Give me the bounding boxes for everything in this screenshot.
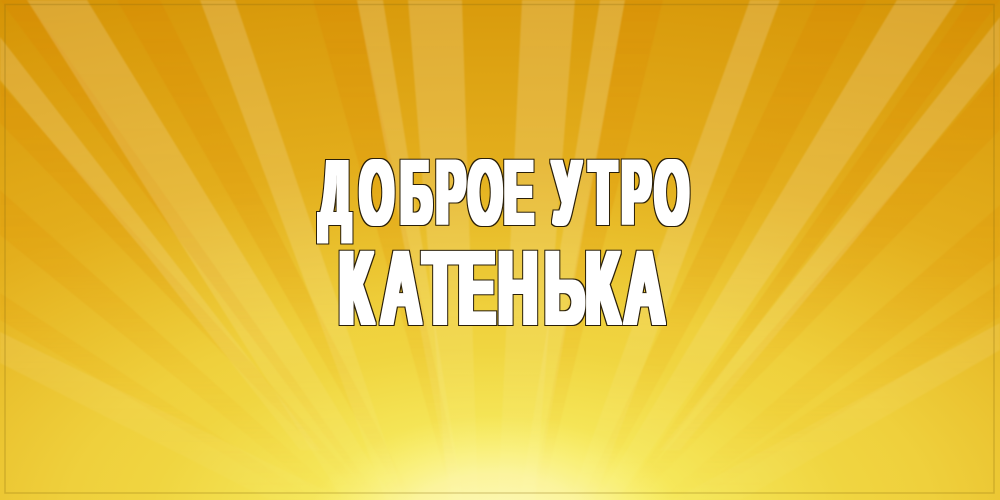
heading line 2: КАТЕНЬКА — [339, 229, 665, 346]
heading line 1: ДОБРОЕ УТРО — [320, 142, 688, 244]
